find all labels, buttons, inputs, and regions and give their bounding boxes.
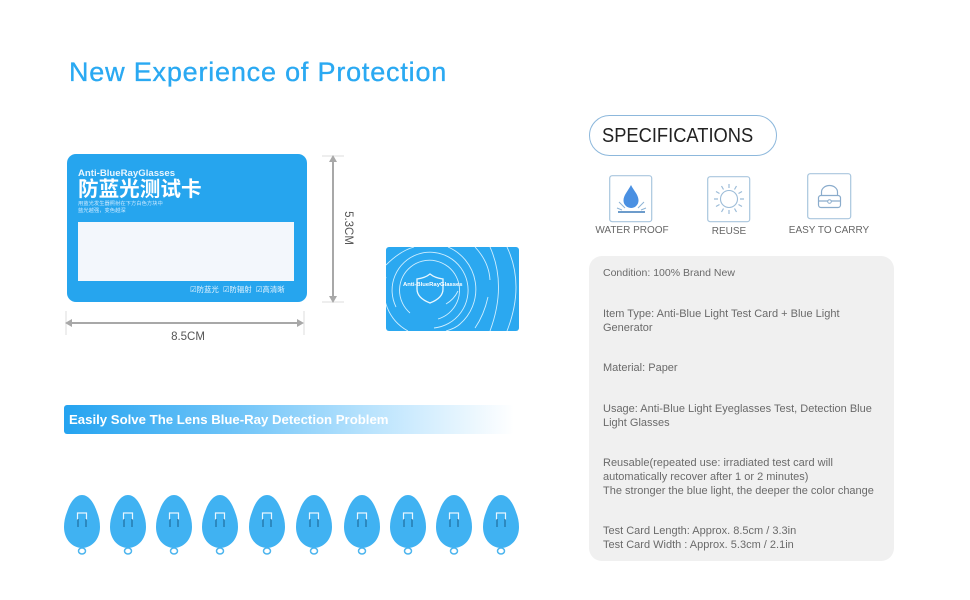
- icon: reuse sun: [707, 176, 750, 222]
- concentric ring pattern: [386, 247, 516, 331]
- card feature labels: ☑防蓝光 ☑防辐射 ☑高清晰: [190, 285, 285, 294]
- height dimension arrow: [322, 155, 344, 303]
- banner text: Easily Solve The Lens Blue-Ray Detection Problem: [69, 412, 389, 427]
- easy to carry label: EASY TO CARRY: [789, 225, 869, 236]
- back card brand text: Anti-BlueRayGlasses: [403, 282, 463, 288]
- width label: 8.5CM: [171, 331, 205, 343]
- water proof label: WATER PROOF: [595, 225, 669, 236]
- icon: easy to carry bag: [807, 173, 852, 220]
- test card size: [603, 525, 796, 551]
- card brand text: Anti-BlueRayGlasses: [78, 168, 175, 179]
- test card back: [386, 247, 519, 331]
- shield outline: [417, 274, 443, 303]
- material: Material: Paper: [603, 362, 678, 374]
- specifications heading text: SPECIFICATIONS: [602, 124, 753, 147]
- reusable: automatically recover after 1 or 2 minutes): [603, 471, 808, 483]
- reusable: Reusable(repeated use: irradiated test card will: [603, 457, 833, 469]
- usage: [603, 403, 872, 429]
- card white test window: [78, 222, 294, 281]
- card small instructions: 用蓝光发生器照射在下方白色方块中: [78, 201, 163, 207]
- test card front: [67, 154, 307, 302]
- card small instructions: 蓝光越强，变色越深: [78, 208, 126, 214]
- height label: 5.3CM: [342, 211, 354, 245]
- row of blue light generators: [64, 495, 519, 555]
- icon: water proof: [609, 175, 652, 222]
- reusable: [603, 457, 874, 497]
- card small instructions: [78, 200, 163, 214]
- title: New Experience of Protection: [69, 57, 447, 87]
- reusable: The stronger the blue light, the deeper the color change: [603, 485, 874, 497]
- width dimension arrow: [65, 311, 304, 335]
- usage: Light Glasses: [603, 417, 670, 429]
- item type: Item Type: Anti-Blue Light Test Card + Blue Light: [603, 308, 840, 320]
- card chinese heading: 防蓝光测试卡: [78, 178, 202, 201]
- specifications heading pill: [589, 115, 777, 156]
- gradient banner: [64, 405, 514, 434]
- test card size: Test Card Width : Approx. 5.3cm / 2.1in: [603, 539, 794, 551]
- specifications panel: [589, 256, 894, 561]
- usage: Usage: Anti-Blue Light Eyeglasses Test, Detection Blue: [603, 403, 872, 415]
- item type: Generator: [603, 322, 653, 334]
- condition: Condition: 100% Brand New: [603, 267, 735, 279]
- test card size: Test Card Length: Approx. 8.5cm / 3.3in: [603, 525, 796, 537]
- item type: [603, 308, 840, 334]
- reuse label: REUSE: [712, 226, 746, 237]
